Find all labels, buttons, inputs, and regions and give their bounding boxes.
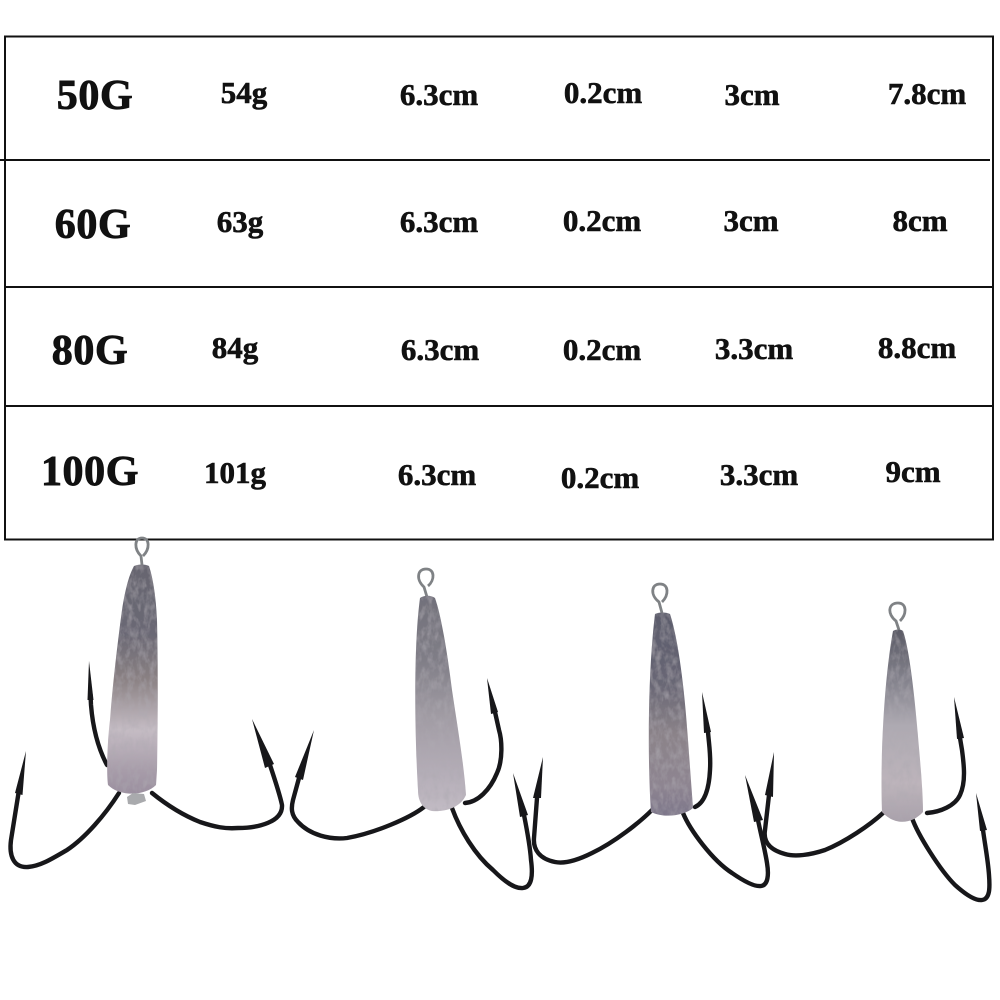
row: 100G: 3.3cm (720, 457, 798, 492)
row: 80G: 80G (52, 328, 128, 374)
row: 60G (55, 202, 948, 248)
table frame (5, 36, 993, 540)
row: 60G: 63g (217, 204, 264, 239)
row: 50G: 7.8cm (888, 76, 966, 111)
sinker hook 4 (765, 603, 989, 900)
row: 50G: 6.3cm (400, 77, 478, 112)
row: 80G (52, 328, 956, 374)
row: 60G: 8cm (892, 203, 948, 238)
row: 50G: 50G (57, 73, 133, 119)
row: 50G: 3cm (724, 77, 780, 112)
row: 100G: 100G (41, 449, 139, 495)
row: 100G: 9cm (885, 454, 941, 489)
row: 100G: 0.2cm (561, 460, 639, 495)
row: 50G (57, 73, 966, 119)
row: 60G: 60G (55, 202, 131, 248)
size table (0, 36, 993, 540)
row: 80G: 3.3cm (715, 331, 793, 366)
row: 50G: 54g (221, 75, 268, 110)
row: 80G: 0.2cm (563, 332, 641, 367)
row: 100G (41, 449, 941, 495)
sinker hook 3 (533, 584, 768, 886)
row: 50G: 0.2cm (564, 75, 642, 110)
row: 60G: 3cm (723, 203, 779, 238)
row: 60G: 6.3cm (400, 204, 478, 239)
row: 80G: 8.8cm (878, 330, 956, 365)
sinker hook 2 (292, 569, 532, 888)
row: 80G: 84g (212, 330, 259, 365)
row: 80G: 6.3cm (401, 332, 479, 367)
row: 60G: 0.2cm (563, 203, 641, 238)
row: 100G: 101g (204, 455, 266, 490)
row: 100G: 6.3cm (398, 457, 476, 492)
sinker hook 1 (largest) (11, 538, 282, 867)
